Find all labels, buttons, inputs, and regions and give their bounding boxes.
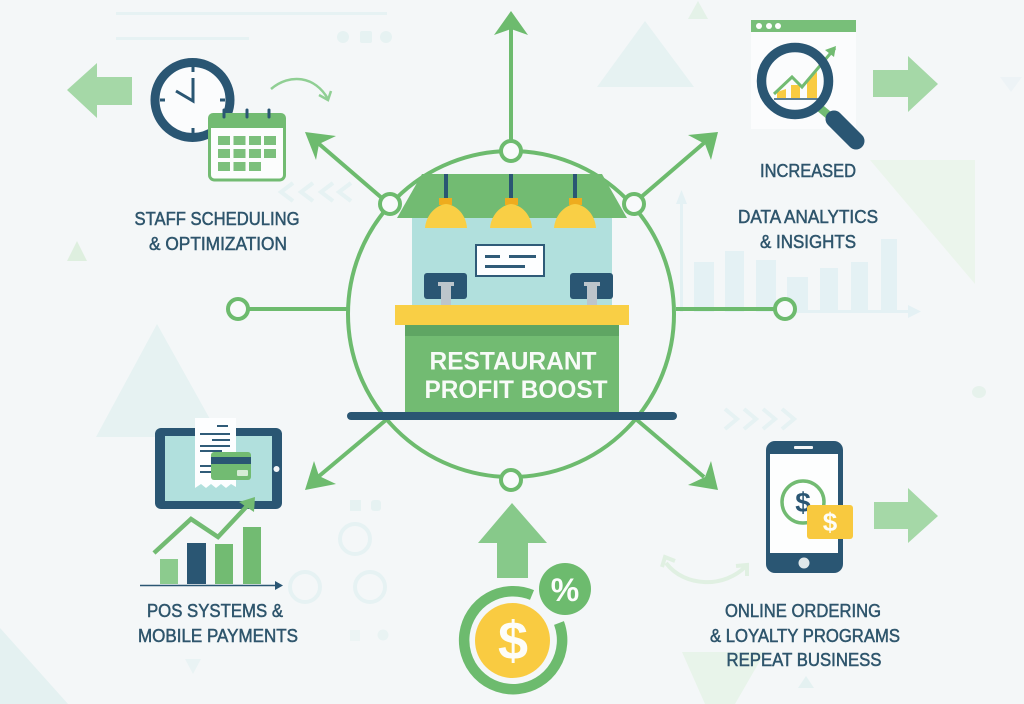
label: online ordering: & LOYALTY PROGRAMS bbox=[710, 626, 900, 646]
hub circle bbox=[348, 151, 674, 477]
label: online ordering: ONLINE ORDERING bbox=[725, 601, 881, 621]
block arrow: staff left bbox=[67, 63, 132, 118]
icon: magnifier with chart bbox=[762, 46, 856, 141]
label: staff bbox=[134, 209, 300, 254]
icon: bar chart growth bbox=[140, 497, 283, 590]
icon: smartphone bbox=[766, 441, 853, 573]
cash note: $ bbox=[823, 507, 838, 537]
restaurant stall bbox=[347, 174, 677, 420]
label: data analytics bbox=[738, 207, 878, 252]
icon: clock bbox=[155, 62, 230, 138]
connector: left bbox=[248, 307, 348, 311]
left monitor bbox=[424, 273, 467, 306]
title bbox=[424, 348, 608, 404]
icon: tablet POS bbox=[155, 418, 282, 509]
label: increased: INCREASED bbox=[760, 161, 856, 181]
label: data analytics: DATA ANALYTICS bbox=[738, 207, 878, 227]
label: POS bbox=[138, 601, 298, 646]
arrow: lower right bbox=[637, 420, 718, 490]
label: online ordering: REPEAT BUSINESS bbox=[726, 650, 882, 670]
stall wall bbox=[412, 218, 612, 308]
icon: percent badge bbox=[539, 563, 591, 615]
hanging lamps bbox=[425, 174, 596, 228]
icon: smartphone: $ bbox=[795, 487, 811, 518]
counter base bbox=[405, 325, 619, 413]
menu sign bbox=[476, 245, 544, 276]
arrow: upper left bbox=[305, 132, 383, 199]
arrow: top bbox=[494, 11, 528, 142]
arrow: lower left bbox=[305, 420, 386, 490]
label: POS: MOBILE PAYMENTS bbox=[138, 626, 298, 646]
icon: dollar coin: $ bbox=[498, 611, 528, 671]
icon: dollar coin bbox=[464, 591, 562, 689]
block arrow: online right bbox=[874, 488, 938, 543]
label: data analytics: & INSIGHTS bbox=[760, 232, 856, 252]
background bar chart bbox=[676, 190, 921, 318]
connector nodes bbox=[228, 141, 795, 490]
curved double arrow bbox=[662, 557, 747, 582]
title: PROFIT BOOST bbox=[424, 376, 608, 404]
connector: right bbox=[676, 307, 776, 311]
icon: calendar bbox=[208, 110, 286, 180]
block arrow: analytics right bbox=[873, 56, 938, 112]
credit card bbox=[211, 452, 251, 480]
icon: percent badge: % bbox=[551, 572, 579, 608]
label: POS: POS SYSTEMS & bbox=[147, 601, 283, 621]
counter top bbox=[395, 305, 629, 325]
label: staff: & OPTIMIZATION bbox=[149, 234, 287, 254]
arrow: upper right bbox=[640, 132, 718, 198]
curved arrow: staff bbox=[271, 79, 331, 100]
label: staff: STAFF SCHEDULING bbox=[134, 209, 300, 229]
block arrow: up bbox=[478, 503, 547, 578]
label: online ordering bbox=[710, 601, 900, 670]
floor bar bbox=[347, 412, 677, 420]
right monitor bbox=[570, 273, 613, 306]
receipt bbox=[195, 418, 236, 488]
title: RESTAURANT bbox=[430, 348, 596, 376]
icon: analytics window bbox=[751, 20, 856, 129]
awning bbox=[397, 174, 627, 218]
